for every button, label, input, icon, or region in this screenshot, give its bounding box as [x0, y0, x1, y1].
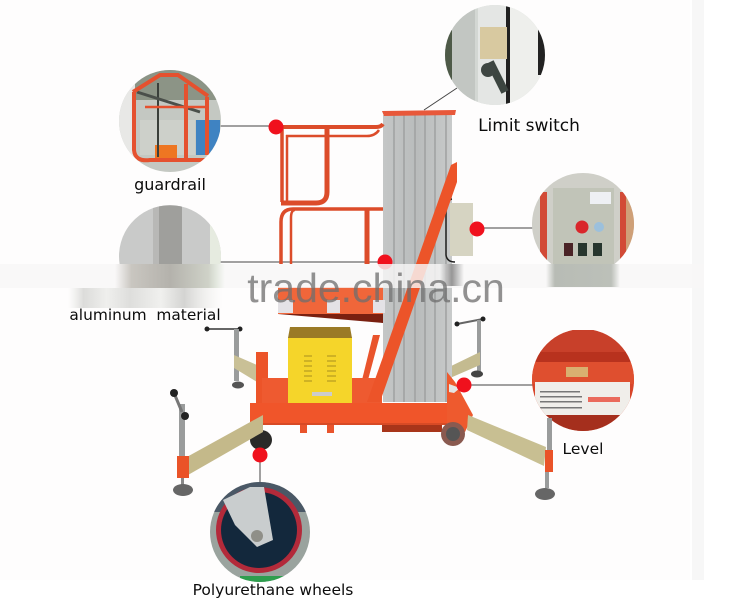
base frame	[250, 372, 473, 433]
guardrail	[281, 124, 383, 264]
diagonal brace	[367, 162, 457, 402]
lift machine	[170, 110, 555, 500]
label: guardrail: guardrail	[134, 175, 206, 194]
inset: polyurethane wheel photo	[209, 482, 311, 582]
marker dots	[252, 120, 484, 462]
rear outrigger left	[204, 326, 257, 388]
rear outrigger right	[447, 316, 486, 378]
control box	[446, 199, 473, 262]
label: limit switch: Limit switch	[478, 116, 580, 136]
label: level: Level	[563, 440, 603, 458]
inset: guardrail photo	[119, 70, 221, 172]
base plate	[256, 352, 382, 404]
platform	[278, 287, 383, 380]
inset: limit switch photo	[445, 5, 545, 106]
inset: aluminum material photo	[119, 205, 221, 265]
outrigger pole over level photo	[547, 418, 552, 450]
label: polyurethane wheels: Polyurethane wheels	[193, 581, 353, 599]
mast	[382, 110, 456, 402]
label: aluminum material: aluminum material	[69, 306, 221, 324]
front-left outrigger	[170, 389, 272, 496]
front-right outrigger	[441, 415, 555, 500]
inset: level photo	[532, 330, 634, 433]
connector lines	[220, 88, 533, 484]
watermark band	[0, 264, 704, 313]
inset: control box photo	[532, 173, 634, 264]
watermark text: trade.china.cn	[247, 265, 505, 311]
yellow power unit	[288, 327, 352, 403]
